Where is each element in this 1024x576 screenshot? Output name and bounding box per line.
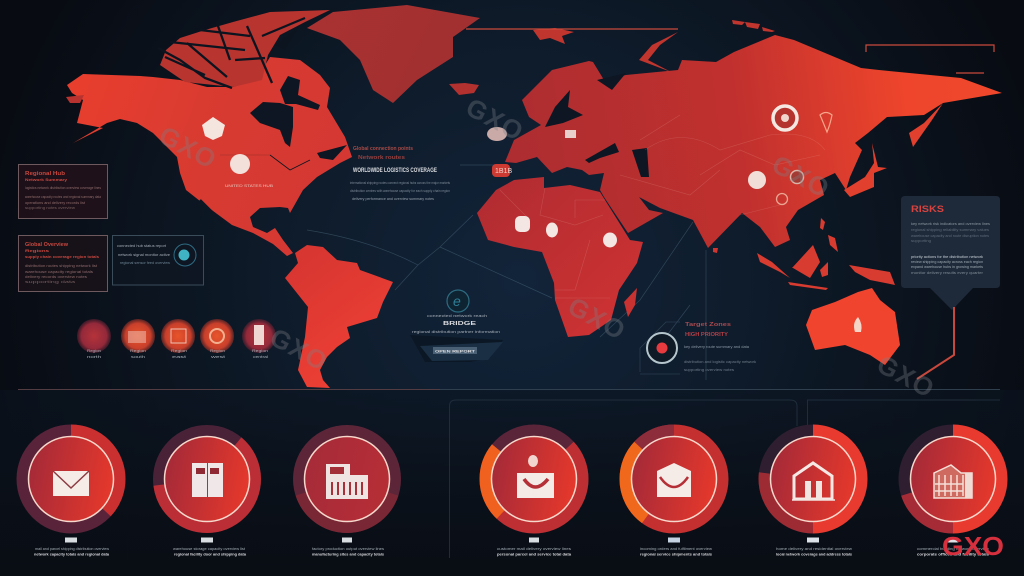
world map <box>66 5 1002 388</box>
panel: teal gauge box: network signal monitor active <box>118 252 171 257</box>
caption 1: network capacity totals and regional data <box>34 552 110 556</box>
caption 6 <box>776 538 853 556</box>
icon card 2: warehouse door <box>153 425 261 533</box>
panel: top left info box: Network Summary <box>25 177 68 182</box>
panel: top left info box: Regional Hub <box>25 171 65 177</box>
panel: teal gauge box: regional sensor feed overview <box>120 260 170 265</box>
icon card 6: house <box>758 424 868 534</box>
panel: target callout: key delivery route summary and data <box>684 344 750 349</box>
text block: centre map label: Network routes <box>358 155 405 161</box>
panel: target callout: distribution and logistic capacity network <box>684 359 756 364</box>
stat 3 <box>161 319 195 359</box>
stat 1: Region <box>87 348 101 353</box>
text block: centre map label: distribution centres with warehouse capacity for each supply chain region <box>350 188 450 193</box>
panel: middle left info box: Regions <box>25 248 50 253</box>
caption 3 <box>312 538 385 556</box>
caption 4: customer mail delivery overview lines <box>497 546 571 551</box>
marker: UK <box>487 127 507 141</box>
caption 1: mail and parcel shipping distribution overview <box>35 546 109 551</box>
panel: right info card with pointer: key network risk indicators and overview lines <box>911 221 990 226</box>
caption 7: commercial building network overview <box>917 546 989 551</box>
panel: middle left info box: warehouse capacity regional totals <box>25 269 93 274</box>
icon card 3: factory <box>293 425 401 533</box>
marker: Canada <box>202 117 225 140</box>
panel: right info card with pointer: monitor delivery results every quarter <box>911 270 984 275</box>
map: South-East Asia islands <box>757 218 895 290</box>
caption 7 <box>917 538 990 556</box>
marker: central Asia <box>748 171 766 189</box>
map: Sri Lanka <box>713 248 718 253</box>
map: Eurasia <box>505 35 1002 248</box>
map: Arctic islands <box>158 10 330 88</box>
marker: East Africa <box>603 232 617 248</box>
icon card 1: envelope <box>16 424 126 534</box>
panel: centre badge: OPEN REPORT <box>435 348 476 354</box>
panel: middle left info box <box>18 236 108 292</box>
caption 7: corporate offices and facility totals <box>917 552 990 556</box>
icon card 5: open envelope <box>620 424 728 534</box>
map: North America <box>66 57 352 256</box>
panel: right info card with pointer: warehouse capacity and route disruption notes <box>911 233 989 238</box>
small round stats row <box>77 319 276 359</box>
divider and frame lines <box>18 388 1000 390</box>
map: Greenland <box>307 5 480 103</box>
panel: centre badge <box>410 290 503 362</box>
stat 3: east <box>172 354 188 359</box>
marker: Central Africa <box>546 222 558 238</box>
marker: Australia <box>854 317 862 332</box>
panel: right info card with pointer: review shipping capacity across each region <box>911 259 983 264</box>
text block: centre map label: international shipping routes connect regional hubs across the major markets <box>350 180 450 185</box>
watermarks: GXO <box>265 322 333 377</box>
panel: top left info box: logistics network distribution overview coverage lines <box>25 185 101 190</box>
stat 4: Region <box>210 348 225 353</box>
panel: top left info box: supporting notes overview <box>25 205 75 210</box>
panel: centre badge: connected network reach <box>427 313 487 318</box>
map: Africa <box>477 177 643 337</box>
stat 2 <box>121 319 155 359</box>
map: South America <box>285 245 393 388</box>
stat 1: north <box>87 354 101 359</box>
marker: East Russia <box>820 112 832 132</box>
stat 4: west <box>211 354 226 359</box>
caption 1 <box>34 538 110 556</box>
panel: top left info box: operations and delivery records list <box>25 200 86 205</box>
marker: South China <box>776 194 788 204</box>
stat 4 <box>200 319 234 359</box>
map: Kamchatka and Japan <box>844 103 943 197</box>
stat 5 <box>242 319 276 359</box>
caption 5: incoming orders and fulfilment overview <box>640 546 712 551</box>
panel: teal gauge box <box>112 236 204 285</box>
logo: GXO: GXO <box>942 531 1004 561</box>
panel: right info card with pointer: regional shipping reliability summary values <box>911 227 989 232</box>
caption 2: regional facility door and shipping data <box>174 552 247 556</box>
marker: West Africa <box>515 216 530 232</box>
panel: target callout <box>640 322 756 374</box>
text block: centre map label: delivery performance and overview summary notes <box>352 196 434 201</box>
panel: middle left info box: Global Overview <box>25 242 68 248</box>
panel: teal gauge box: connected hub status report <box>117 243 167 248</box>
marker label: USA: UNITED STATES HUB <box>225 183 273 188</box>
caption 3: factory production output overview lines <box>312 546 384 551</box>
caption 4: personal parcel and service total data <box>497 552 572 556</box>
map markers <box>202 106 862 332</box>
panel: target callout: supporting overview notes <box>684 367 734 372</box>
caption 3: manufacturing sites and capacity totals <box>312 552 385 556</box>
marker: China ring <box>790 170 804 184</box>
map: Arctic Russia and Svalbard <box>533 20 775 72</box>
caption 2 <box>173 538 247 556</box>
marker: Central Europe <box>565 130 576 138</box>
marker: Russia ring <box>773 106 797 130</box>
map: connection lines <box>307 165 706 380</box>
panel: middle left info box: supporting data <box>25 279 76 284</box>
watermarks: GXO <box>563 291 631 346</box>
top right accent lines <box>466 29 994 73</box>
text block: centre map label: WORLDWIDE LOGISTICS COVERAGE <box>353 168 437 174</box>
watermarks: GXO <box>767 149 835 204</box>
panel: right info card with pointer: expand warehouse hubs in growing markets <box>911 264 983 269</box>
icon card 7: building <box>898 424 1008 534</box>
panel: centre badge: regional distribution partner information <box>412 329 500 334</box>
arrow: callout leader line <box>917 307 954 379</box>
watermarks: GXO <box>872 349 940 404</box>
text block: centre map label: Global connection points <box>353 146 413 152</box>
panel: centre badge: e <box>453 293 461 309</box>
panel: middle left info box: distribution routes shipping network list <box>25 263 98 268</box>
stat 5: central <box>253 354 268 359</box>
marker: Spain callout: 1B1B <box>495 168 512 175</box>
panel: right info card with pointer <box>901 196 1000 310</box>
icon card 4: person mail <box>480 424 588 534</box>
bottom icon row <box>16 424 1008 556</box>
caption 5: regional service shipments and totals <box>640 552 713 556</box>
marker: USA <box>230 154 250 174</box>
caption 2: warehouse storage capacity overview list <box>173 546 246 551</box>
watermarks <box>154 92 940 404</box>
stat 2: south <box>131 354 145 359</box>
panel: target callout: HIGH PRIORITY <box>685 332 729 338</box>
watermarks: GXO <box>154 120 222 175</box>
panel: middle left info box: delivery records overview notes <box>25 274 87 279</box>
stat 3: Region <box>171 348 187 353</box>
map: Australia <box>806 288 900 365</box>
watermarks: GXO <box>461 92 529 147</box>
panel: middle left info box: supply chain coverage region totals <box>25 255 99 259</box>
text block: centre map label <box>350 146 450 201</box>
map: Madagascar <box>624 288 637 317</box>
panel: top left info box <box>18 164 108 218</box>
stat 1 <box>77 319 111 359</box>
caption 6: home delivery and residential overview <box>776 546 852 551</box>
caption 4 <box>497 538 572 556</box>
stat 2: Region <box>130 348 146 353</box>
caption 6: local network coverage and address totals <box>776 552 853 556</box>
stat 5: Region <box>252 348 268 353</box>
caption 5 <box>640 538 713 556</box>
panel: target callout: Target Zones <box>685 322 731 328</box>
panel: right info card with pointer: supporting <box>911 238 931 243</box>
panel: right info card with pointer: priority actions for the distribution network <box>911 254 983 259</box>
panel: centre badge: BRIDGE <box>443 321 477 327</box>
panel: right info card with pointer: RISKS <box>911 204 944 214</box>
marker: Spain callout <box>492 164 512 177</box>
map: Iceland <box>449 83 479 95</box>
panel: top left info box: warehouse capacity routes and regional summary data <box>25 194 102 199</box>
